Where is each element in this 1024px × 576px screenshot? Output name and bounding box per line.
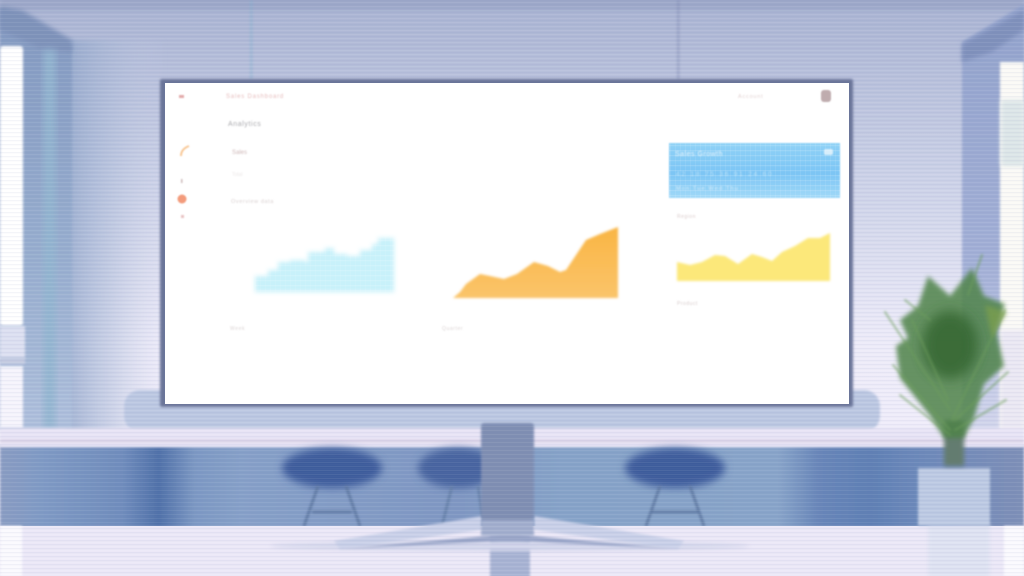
label: card caption: Region xyxy=(677,214,696,220)
sidebar icons xyxy=(178,95,189,218)
section heading: Analytics xyxy=(228,121,261,128)
stool: right xyxy=(625,448,725,526)
card bottom row: Mon Tue Wed Thu xyxy=(676,186,739,192)
monitor bezel xyxy=(160,79,853,407)
counter top xyxy=(0,428,1024,447)
icon: orange arc xyxy=(181,146,189,156)
monitor screen xyxy=(165,83,849,404)
monitor stand column xyxy=(481,423,534,536)
right window xyxy=(962,4,1024,432)
label: chart one: Week xyxy=(230,326,245,332)
label: chart three: Product xyxy=(677,301,698,307)
monitor stand base xyxy=(334,516,684,549)
icon: small dot two xyxy=(181,215,184,218)
area chart: orange xyxy=(453,227,618,298)
label: sales: Sales xyxy=(232,150,247,156)
card middle row: 42 18 75 36 91 24 60 xyxy=(676,171,773,178)
label: total: Total xyxy=(232,172,243,178)
icon: menu xyxy=(179,95,184,98)
floor xyxy=(0,526,1024,576)
card icon xyxy=(824,149,833,155)
monitor xyxy=(160,79,853,407)
icon: orange circle xyxy=(178,194,186,204)
icon: small dot xyxy=(181,179,182,183)
plant xyxy=(885,255,1008,466)
plant pot xyxy=(918,468,990,526)
card title: Sales Growth xyxy=(675,151,723,158)
header right: Account xyxy=(738,94,763,100)
bar chart: cyan xyxy=(255,236,395,293)
header title: Sales Dashboard xyxy=(226,94,284,100)
left window xyxy=(0,6,72,430)
stool: middle xyxy=(418,448,498,526)
hanging cables xyxy=(250,0,680,80)
icon: avatar xyxy=(821,90,831,102)
label: overview: Overview data xyxy=(231,199,274,205)
info card: blue xyxy=(669,143,840,198)
area chart: yellow xyxy=(677,233,830,281)
label: chart two: Quarter xyxy=(442,326,463,332)
shelf behind monitor xyxy=(124,390,880,432)
under-counter area xyxy=(0,446,1024,527)
stool: left xyxy=(282,448,382,526)
